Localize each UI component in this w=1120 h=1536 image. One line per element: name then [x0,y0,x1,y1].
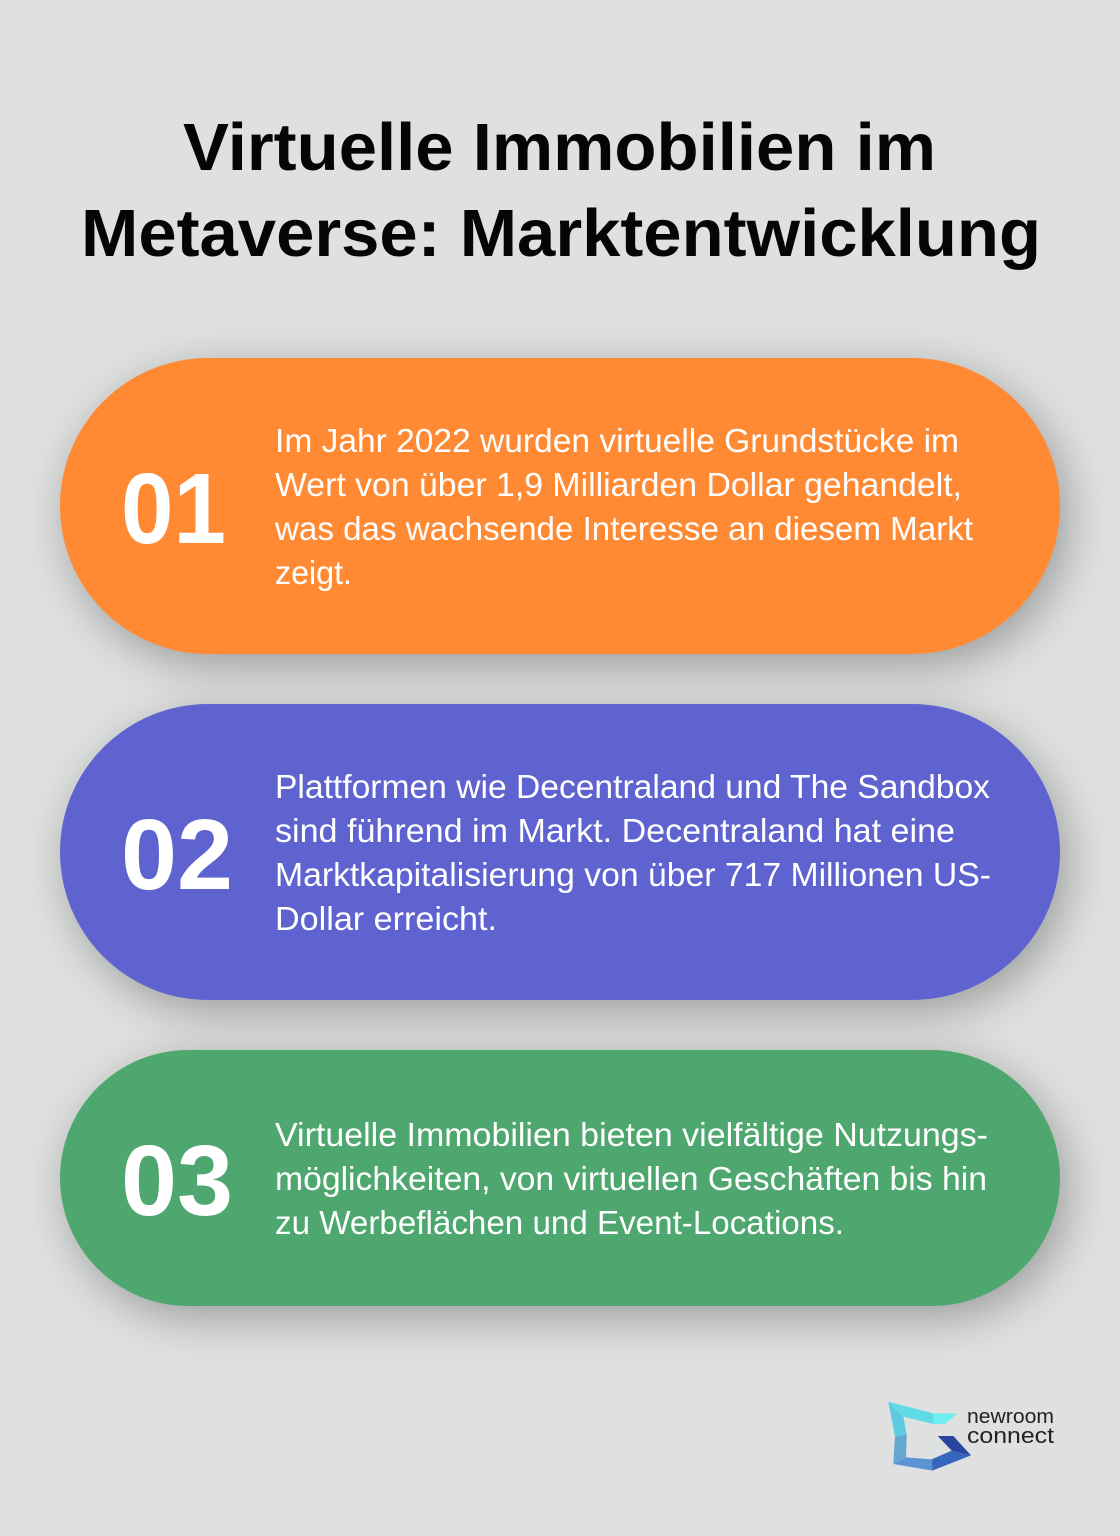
number 03: 03 [121,1125,233,1237]
card background blue [60,704,1060,1000]
text block 02: Marktkapitalisierung von über 717 Millionen US- [275,856,991,893]
text block 01: was das wachsende Interesse an diesem Markt [274,510,973,547]
logo wordmark [967,1406,1054,1448]
text block 02: Dollar erreicht. [275,900,497,937]
card background green [60,1050,1060,1306]
text block 01: zeigt. [275,554,352,591]
text block 03: möglichkeiten, von virtuellen Geschäften bis hin [275,1160,987,1197]
logo: newroom connect [888,1402,1054,1471]
text block 03 [275,1116,988,1241]
text block 01: Im Jahr 2022 wurden virtuelle Grundstücke im [275,422,959,459]
panel: 02 [60,704,1060,1000]
text block 03: Virtuelle Immobilien bieten vielfältige Nutzungs- [275,1116,988,1153]
panel: 03 [60,1050,1060,1306]
text block 01 [274,422,973,591]
number 02: 02 [121,799,233,911]
title: Virtuelle Immobilien im [183,110,936,185]
text block 01: Wert von über 1,9 Milliarden Dollar gehandelt, [275,466,962,503]
title [81,110,1041,271]
text block 02 [275,768,991,937]
text block 02: Plattformen wie Decentraland und The Sandbox [275,768,991,805]
icon: logo mark [888,1402,971,1471]
logo wordmark: newroom [967,1406,1054,1428]
card background orange [60,358,1060,654]
title: Metaverse: Marktentwicklung [81,196,1041,271]
number 01: 01 [121,453,226,565]
text block 03: zu Werbeflächen und Event-Locations. [275,1204,844,1241]
logo wordmark: connect [967,1423,1054,1448]
panel: 01 [60,358,1060,654]
text block 02: sind führend im Markt. Decentraland hat eine [275,812,955,849]
